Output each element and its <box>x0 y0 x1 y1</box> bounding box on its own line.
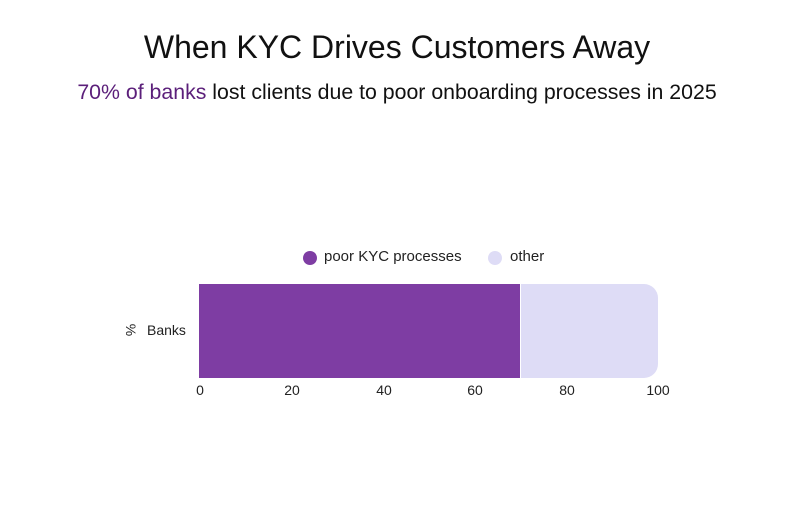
bar: poor KYC 70 <box>199 284 520 378</box>
x axis labels: 80 <box>559 382 575 398</box>
bar: other 30 <box>521 284 658 378</box>
subtitle: 70% of banks lost clients due to poor onboarding processes in 2025 <box>77 80 717 104</box>
y label <box>123 322 186 338</box>
legend item: poor KYC: poor KYC processes <box>324 248 462 265</box>
x axis labels: 40 <box>376 382 392 398</box>
x axis labels: 20 <box>284 382 300 398</box>
legend item: other: other <box>510 248 544 265</box>
x axis labels: 0 <box>196 382 204 398</box>
bar chart <box>199 284 658 378</box>
title: When KYC Drives Customers Away <box>144 29 650 65</box>
x axis labels: 100 <box>646 382 670 398</box>
y label: Banks <box>147 322 186 338</box>
y label: % <box>123 324 139 336</box>
x axis labels <box>196 382 670 398</box>
x axis labels: 60 <box>467 382 483 398</box>
legend <box>303 248 544 265</box>
legend item: other <box>488 248 544 265</box>
